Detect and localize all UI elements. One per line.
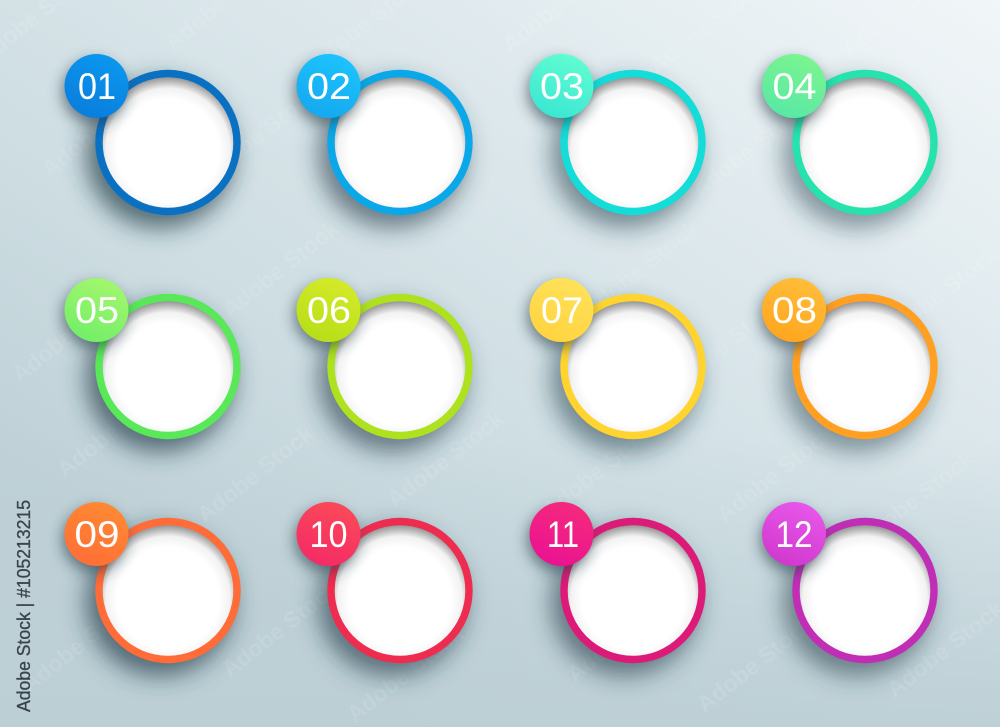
circle 04	[760, 54, 938, 228]
badge 05: 05	[75, 290, 119, 331]
badge 07	[530, 278, 594, 342]
badge 01	[64, 54, 128, 118]
badge 01: 01	[78, 66, 116, 107]
badge 09	[64, 502, 128, 566]
badge 08	[762, 278, 826, 342]
watermarks: Adobe Stock	[877, 240, 1000, 347]
circle 10	[294, 502, 473, 676]
badge 11	[530, 502, 594, 566]
circle 11	[527, 502, 706, 676]
watermarks: Adobe Stock	[577, 215, 704, 322]
badge 10: 10	[310, 514, 348, 555]
badge 07: 07	[541, 290, 583, 331]
circle 03	[527, 54, 706, 228]
watermarks: Adobe Stock	[562, 580, 689, 687]
watermarks: Adobe Stock	[217, 215, 344, 322]
badge 10	[296, 502, 360, 566]
watermarks: Adobe Stock	[827, 120, 954, 227]
circle 01	[62, 54, 241, 228]
badge 03: 03	[540, 66, 584, 107]
watermarks: Adobe Stock	[692, 610, 819, 717]
badge 04: 04	[772, 66, 816, 107]
watermarks: Adobe Stock	[52, 375, 179, 482]
badge 11: 11	[547, 514, 579, 555]
badge 08: 08	[772, 290, 817, 331]
badge 03	[530, 54, 594, 118]
badge 02: 02	[307, 66, 351, 107]
watermarks: Adobe Stock	[712, 420, 839, 527]
watermarks: Adobe Stock	[537, 415, 664, 522]
watermarks: Adobe Stock	[217, 575, 344, 682]
badge 06	[296, 278, 360, 342]
circle 06	[294, 278, 473, 452]
badge 12	[762, 502, 826, 566]
circle 09	[62, 502, 241, 676]
watermarks: Adobe Stock	[687, 95, 814, 202]
circle 08	[760, 278, 938, 452]
watermarks: Adobe Stock	[17, 590, 144, 697]
badge 09: 09	[74, 514, 120, 555]
watermarks: Adobe Stock	[662, 290, 789, 397]
circle 07	[527, 278, 706, 452]
watermarks: Adobe Stock	[852, 445, 979, 552]
watermarks: Adobe Stock	[7, 280, 134, 387]
watermarks: Adobe Stock	[192, 420, 319, 527]
vertical stock credit: Adobe Stock | #105213215	[13, 500, 34, 712]
watermarks: Adobe Stock	[37, 75, 164, 182]
badge 04	[762, 54, 826, 118]
watermarks: Adobe Stock	[342, 620, 469, 727]
watermarks: Adobe Stock	[382, 405, 509, 512]
circle 02	[294, 54, 473, 228]
badge 02	[296, 54, 360, 118]
badge 06: 06	[307, 290, 351, 331]
badge 05	[64, 278, 128, 342]
badge 12: 12	[776, 514, 812, 555]
circle 12	[760, 502, 938, 676]
circle 05	[62, 278, 241, 452]
watermarks: Adobe Stock	[197, 80, 324, 187]
